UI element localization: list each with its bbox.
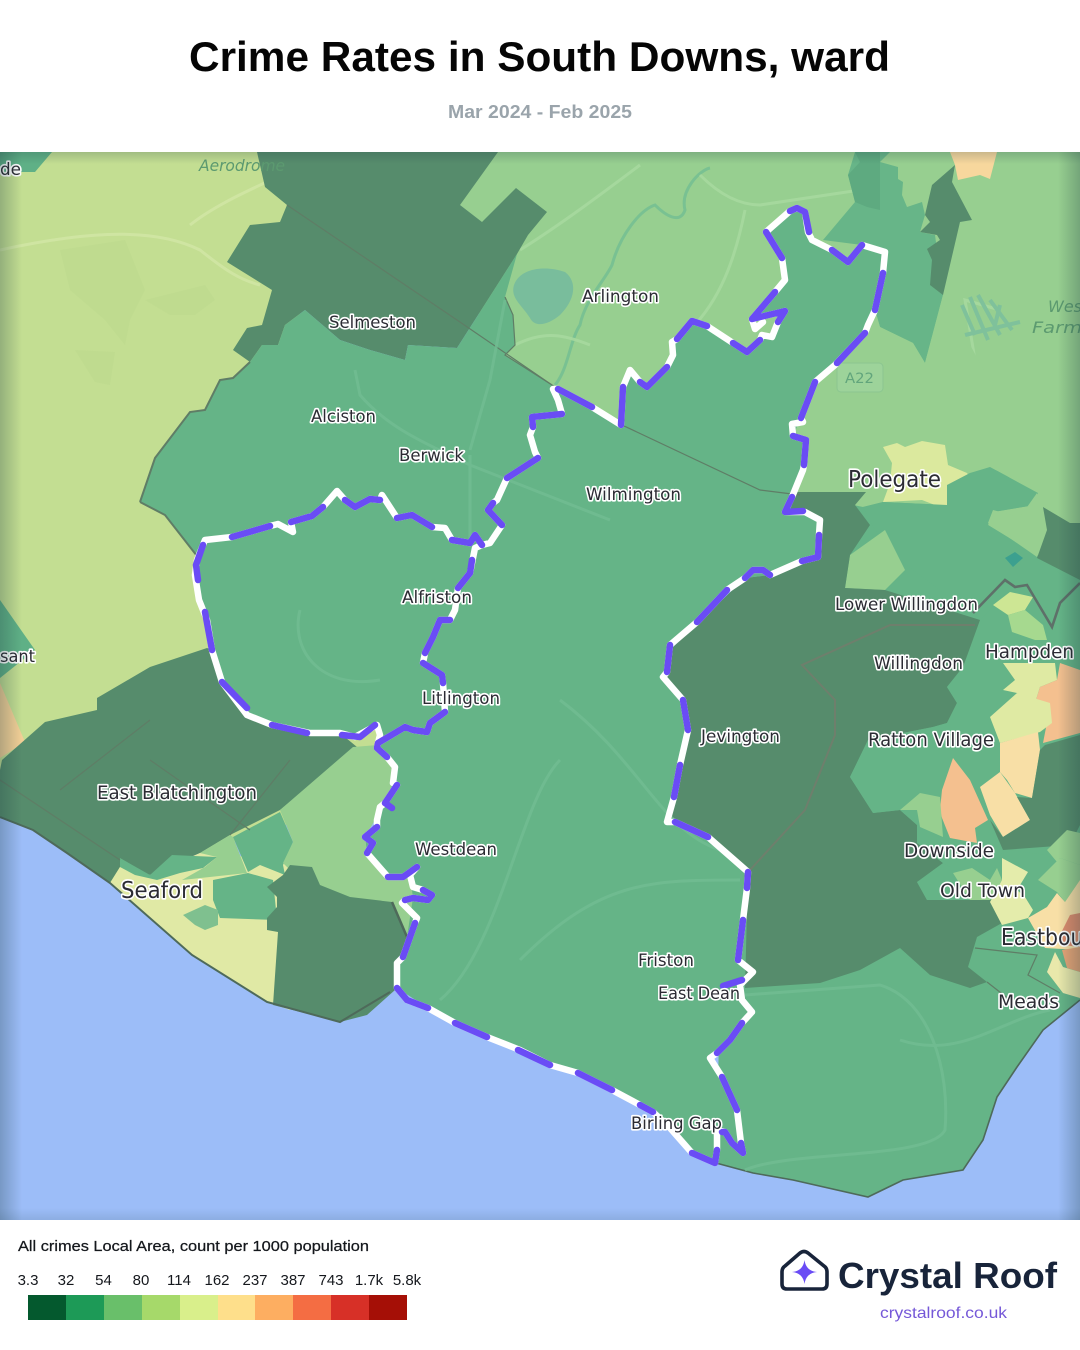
legend title: All crimes Local Area, count per 1000 population [18,1238,369,1255]
legend tick labels: 387 [280,1272,306,1289]
legend tick labels: 162 [204,1272,230,1289]
selected ward boundary: purple dashes [196,208,883,1163]
legend tick labels: 54 [95,1272,112,1289]
map: right-hand medium wards [716,467,1080,1197]
map place labels: Berwick [399,446,464,466]
map: western faint fields [60,240,215,385]
map place labels: Lower Willingdon [835,595,978,615]
map: East Blatchington dark ward [0,648,357,883]
legend tick labels: 32 [58,1272,74,1289]
map place labels: Farm [1032,318,1080,337]
wordmark: Crystal Roof [838,1255,1058,1296]
legend tick labels: 80 [133,1272,149,1289]
legend tick labels [18,1272,422,1289]
map place labels: Alfriston [402,588,472,608]
title: Crime Rates in South Downs, ward [189,33,890,80]
map place labels: Wilmington [586,485,681,505]
map place labels: East Blatchington [97,782,257,804]
map place labels: Polegate [848,467,941,493]
map place labels: Ratton Village [868,729,994,751]
map: rivers and roads, north [0,165,1020,385]
map: north-east light green land [460,152,1080,576]
map place labels: Arlington [582,287,659,307]
map place labels: de [0,160,21,180]
choropleth map [0,152,1080,1220]
map place labels: Old Town [940,880,1025,902]
map: sea [0,310,1080,1220]
subtitle: date range: Mar 2024 - Feb 2025 [448,102,632,122]
map place labels: sant [0,647,35,667]
map place labels: Friston [638,951,694,971]
map place labels: Alciston [311,407,376,427]
map place labels: Westdean [415,840,497,860]
map: Polegate yellow wards [883,441,968,505]
map place labels: Hampden [985,641,1074,663]
website url: crystalroof.co.uk [880,1305,1008,1322]
map: lower boundary lines [0,205,1080,1197]
map: Old Town and Eastbourne wards [917,830,1080,1000]
map edge vignette [0,152,1080,1220]
map place labels: Litlington [422,689,500,709]
map: dark ward by Seaford Head [267,865,407,1022]
map: Willingdon and Hampden wards [850,592,1080,877]
map place labels: Meads [998,991,1059,1013]
map place labels: Downside [904,840,994,862]
map: Seaford wards [110,812,293,1010]
map: far-left wards [0,152,52,758]
map: faint roads in main ward [298,300,1050,1170]
legend tick labels: 743 [318,1272,344,1289]
legend tick labels: 237 [242,1272,268,1289]
map: thick district border [973,580,1080,627]
A22 road sign: A22 [845,371,874,387]
map: light ward by Westdean [280,745,413,937]
map place labels: Aerodrome [198,156,285,175]
legend tick labels: 5.8k [393,1272,422,1289]
map place labels [0,156,1080,1134]
map: central-east dark wards [663,492,1002,988]
map place labels: East Dean [658,984,740,1004]
legend [18,1238,422,1320]
map: north-east medium wards [823,152,997,363]
map: central main ward [140,208,885,1163]
map: north-west dark ward [227,152,547,362]
map place labels: Willingdon [874,654,963,674]
map place labels: Seaford [121,878,203,904]
map: western low-crime land [0,152,377,882]
icon: house with star [782,1252,827,1289]
map: south of Polegate wards [845,467,1080,590]
map place labels: Birling Gap [631,1114,722,1134]
map: Arlington reservoir [513,268,573,324]
legend colour scale [28,1295,407,1320]
legend tick labels: 3.3 [18,1272,38,1289]
selected ward boundary: white casing [195,208,885,1163]
logo: Crystal Roof [782,1252,1058,1322]
map: light ward beside Polegate [796,296,1038,494]
A22 road sign [837,363,883,392]
map place labels: Selmeston [329,313,416,333]
legend tick labels: 114 [167,1272,191,1289]
legend tick labels: 1.7k [355,1272,384,1289]
map place labels: Jevington [700,727,780,747]
